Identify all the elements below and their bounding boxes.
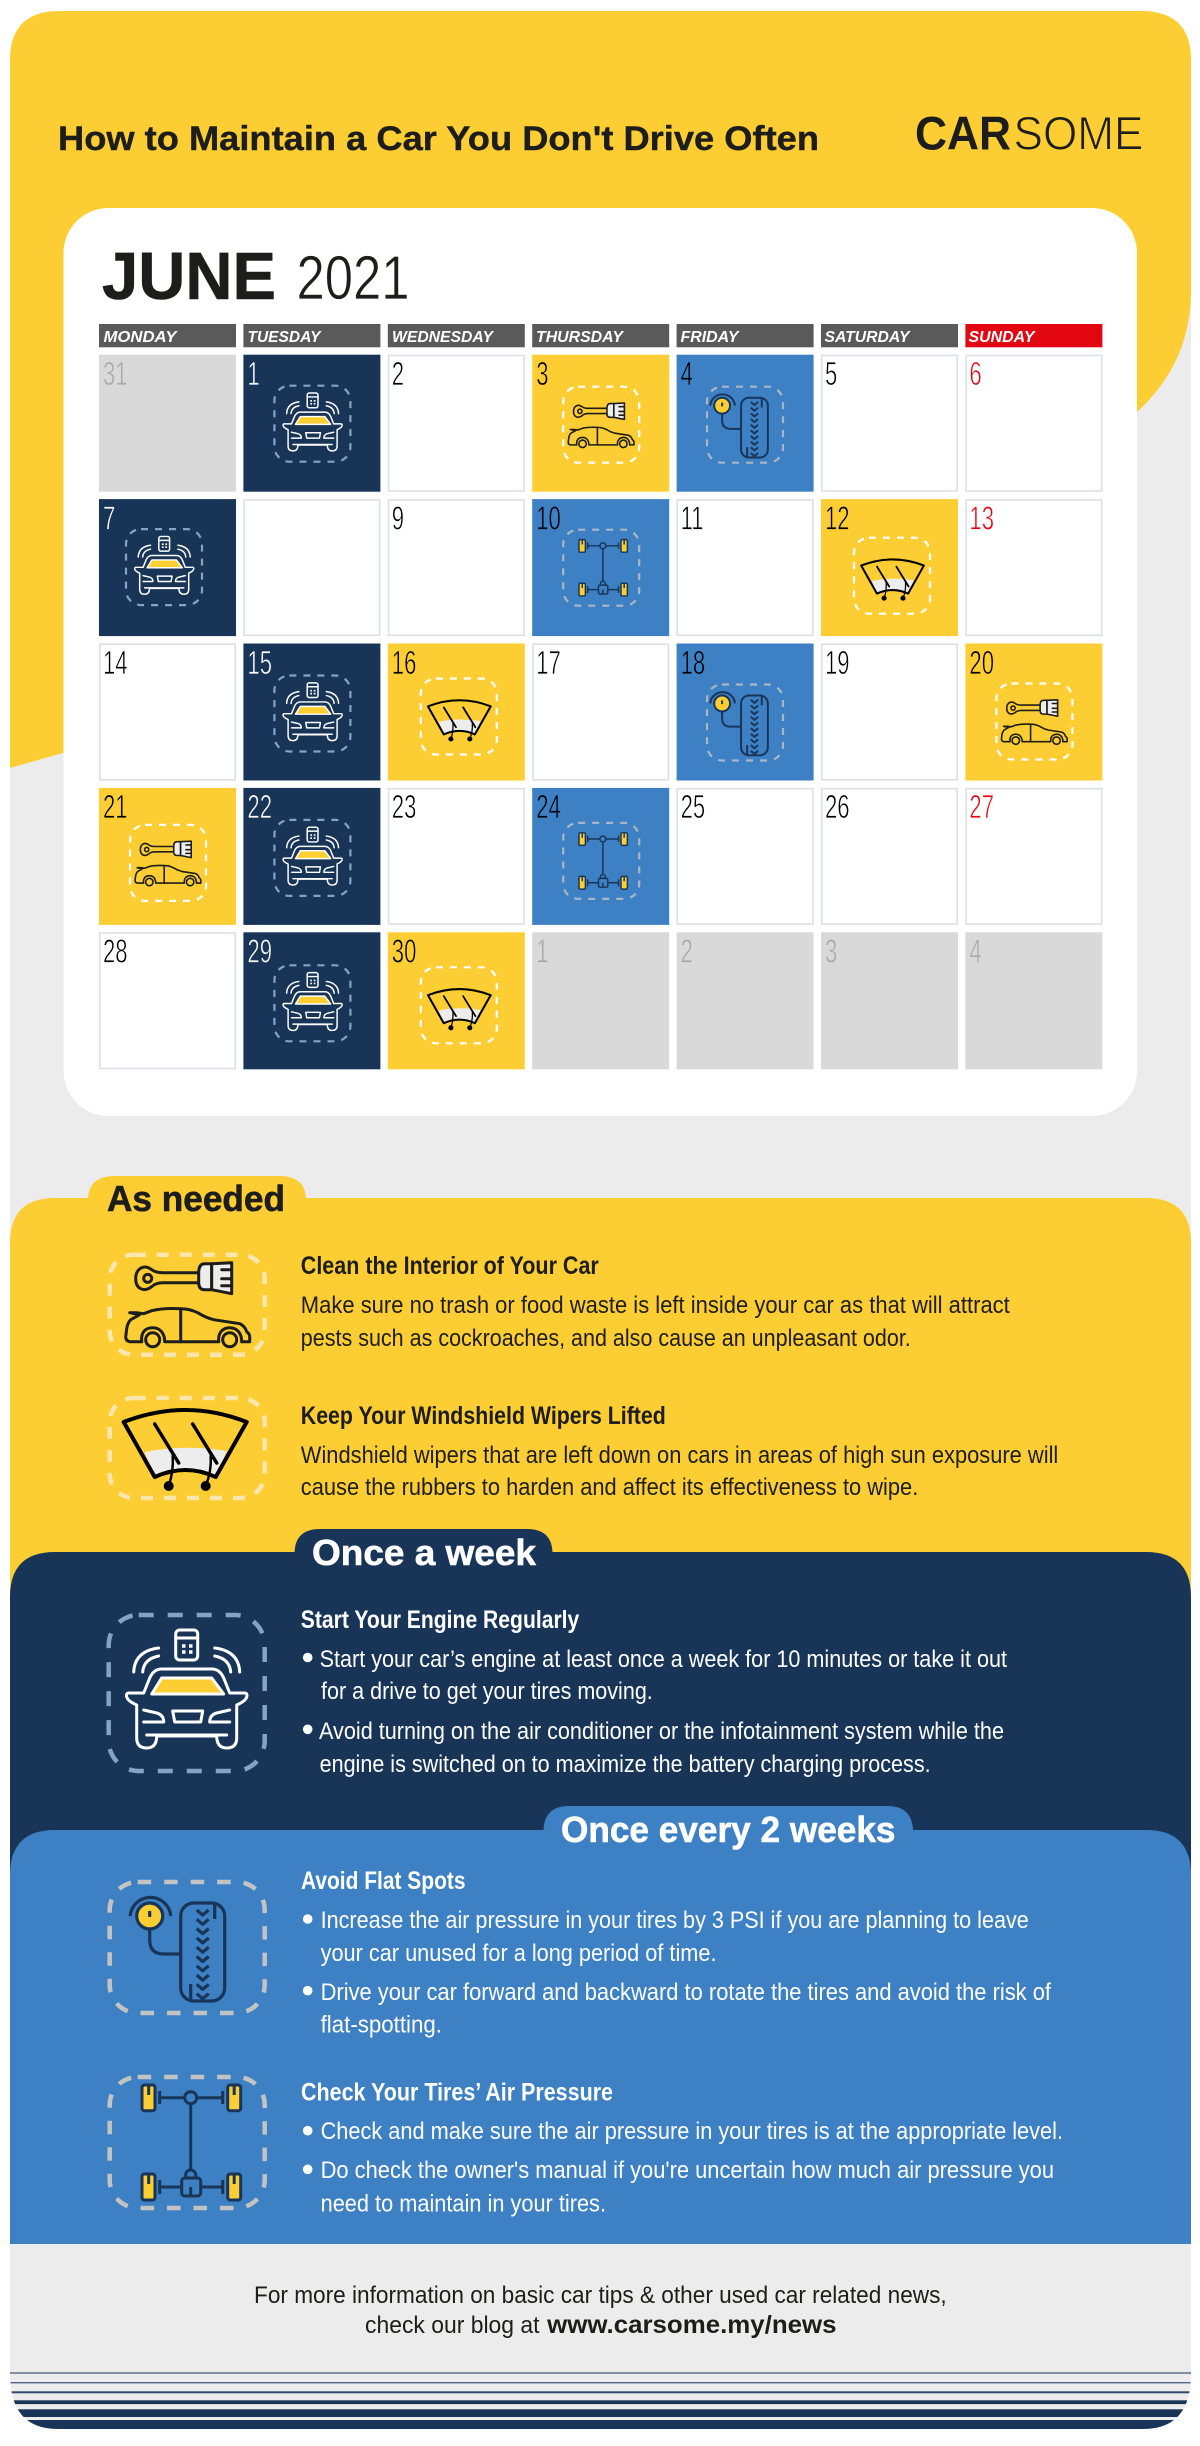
day 10: air pressure: 10 — [536, 500, 561, 536]
day 24: air pressure — [532, 788, 669, 925]
day 28 — [100, 933, 235, 1069]
day 12: wipers: 12 — [825, 500, 850, 536]
footer text: www.carsome.my/news — [546, 2311, 836, 2339]
weekday header row: TUESDAY — [248, 329, 322, 346]
day 24: air pressure: 24 — [536, 789, 561, 825]
text: windshield wipers: Keep Your Windshield Wipers Lifted — [301, 1402, 666, 1430]
day 25: 25 — [681, 789, 705, 825]
icon: windshield wipers — [110, 1398, 265, 1498]
weekday header row: FRIDAY — [680, 329, 740, 346]
text: windshield wipers — [301, 1402, 1058, 1501]
day 13: 13 — [969, 500, 994, 536]
text: avoid flat spots: Drive your car forward and backward to rotate the tires and avoid the risk of — [321, 1979, 1051, 2006]
day 14 — [100, 644, 235, 780]
day 4: flat spots — [677, 355, 814, 492]
panel: calendar card — [64, 208, 1137, 1116]
blank cell — [244, 500, 380, 635]
text: check tire pressure: Check Your Tires’ Air Pressure — [301, 2079, 613, 2107]
text: avoid flat spots: your car unused for a long period of time. — [321, 1940, 716, 1967]
day 3: clean interior: 3 — [536, 356, 548, 392]
day 19: 19 — [825, 644, 850, 681]
day 6: 6 — [969, 356, 982, 392]
day 26: 26 — [825, 789, 850, 825]
panel: yellow header background — [10, 11, 1191, 768]
day 25 — [677, 789, 813, 924]
calendar heading: June 2021: JUNE — [102, 239, 276, 314]
day 20: clean interior: 20 — [969, 644, 994, 681]
panel: once a week — [10, 1529, 1191, 1900]
day 27 — [966, 789, 1102, 924]
day 15: start engine: 15 — [247, 644, 272, 681]
day 17 — [533, 644, 668, 780]
footer text: For more information on basic car tips & other used car related news, — [254, 2282, 947, 2309]
next month day 2 — [677, 932, 814, 1069]
day 23 — [389, 789, 524, 924]
weekday header row: SATURDAY — [824, 329, 911, 346]
tab: as needed: As needed — [107, 1178, 285, 1219]
text: check tire pressure: Check and make sure the air pressure in your tires is at the appropriate level. — [321, 2118, 1063, 2145]
weekday header row: THURSDAY — [536, 329, 624, 346]
day 15: start engine — [243, 644, 380, 780]
weekday header row: WEDNESDAY — [392, 329, 494, 346]
day 11 — [677, 500, 813, 635]
tab: once every 2 weeks: Once every 2 weeks — [561, 1809, 896, 1850]
weekday header row: MONDAY — [104, 329, 178, 346]
text: start your engine: engine is switched on to maximize the battery charging process. — [320, 1751, 931, 1778]
text: avoid flat spots: flat-spotting. — [321, 2012, 442, 2039]
day 5 — [822, 355, 957, 491]
day 7: start engine: 7 — [103, 500, 115, 536]
day 22: start engine — [243, 788, 380, 925]
day 1: start engine: 1 — [247, 356, 260, 392]
previous month day 31 — [99, 355, 236, 492]
next month day 1: 1 — [536, 933, 548, 970]
icon: chassis air pressure — [110, 2077, 265, 2208]
day 29: start engine — [243, 932, 380, 1069]
day 30: wipers: 30 — [392, 933, 416, 970]
text: start your engine — [301, 1606, 1007, 1778]
next month day 1 — [532, 932, 669, 1069]
day 12: wipers — [821, 499, 958, 636]
footer text — [254, 2282, 947, 2339]
previous month day 31: 31 — [103, 356, 128, 392]
footer text: check our blog at — [365, 2312, 540, 2339]
day 3: clean interior — [532, 355, 669, 492]
next month day 4 — [965, 932, 1102, 1069]
icon: clean interior — [110, 1255, 265, 1355]
text: clean the interior — [301, 1252, 1010, 1352]
footer stripes — [0, 2372, 1200, 2429]
day 21: clean interior — [99, 788, 236, 925]
text: avoid flat spots: Avoid Flat Spots — [301, 1867, 466, 1895]
day 9: 9 — [392, 500, 404, 536]
icon: start engine — [109, 1615, 265, 1771]
text: avoid flat spots: Increase the air pressure in your tires by 3 PSI if you are planning to leave — [321, 1907, 1029, 1934]
text: windshield wipers: cause the rubbers to harden and affect its effectiveness to wipe. — [301, 1474, 918, 1501]
text: start your engine: Start Your Engine Regularly — [301, 1606, 579, 1634]
day 18: flat spots — [677, 644, 814, 780]
day 10: air pressure — [532, 499, 669, 636]
day 2: 2 — [392, 356, 404, 392]
day 30: wipers — [388, 932, 525, 1069]
text: avoid flat spots — [301, 1867, 1051, 2039]
day 21: clean interior: 21 — [103, 789, 128, 825]
day 19 — [822, 644, 957, 780]
weekday header row — [99, 324, 1102, 347]
next month day 3 — [821, 932, 958, 1069]
day 28: 28 — [103, 933, 128, 970]
day 26 — [822, 789, 957, 924]
next month day 2: 2 — [681, 933, 693, 970]
next month day 3: 3 — [825, 933, 837, 970]
day 16: wipers: 16 — [392, 644, 416, 681]
weekday header row: SUNDAY — [968, 329, 1036, 346]
day 4: flat spots: 4 — [681, 356, 693, 392]
day 23: 23 — [392, 789, 416, 825]
day 9 — [389, 500, 524, 635]
text: start your engine: for a drive to get your tires moving. — [321, 1678, 653, 1705]
text: start your engine: Avoid turning on the air conditioner or the infotainment system while the — [319, 1718, 1004, 1745]
calendar heading: June 2021 — [102, 239, 410, 314]
day 22: start engine: 22 — [247, 789, 272, 825]
day 2 — [389, 355, 524, 491]
text: check tire pressure — [301, 2079, 1063, 2218]
logo: CARSOME: SOME — [1014, 106, 1144, 159]
day 27: 27 — [969, 789, 994, 825]
day 13 — [966, 500, 1102, 635]
logo: CARSOME — [915, 106, 1144, 159]
day 11: 11 — [681, 500, 704, 536]
text: check tire pressure: Do check the owner's manual if you're uncertain how much air pressure you — [321, 2157, 1054, 2184]
day 7: start engine — [99, 499, 236, 636]
day 14: 14 — [103, 644, 128, 681]
icon: tire flat spots — [110, 1882, 265, 2013]
text: clean the interior: Clean the Interior of Your Car — [301, 1252, 599, 1280]
text: clean the interior: Make sure no trash or food waste is left inside your car as that will attract — [301, 1292, 1010, 1319]
text: clean the interior: pests such as cockroaches, and also cause an unpleasant odor. — [301, 1325, 911, 1352]
tab: once a week: Once a week — [312, 1532, 537, 1573]
day 18: flat spots: 18 — [681, 644, 705, 681]
text: check tire pressure: need to maintain in your tires. — [321, 2191, 606, 2218]
logo: CARSOME: CAR — [915, 106, 1011, 159]
day 6 — [966, 355, 1102, 491]
text: start your engine: Start your car’s engine at least once a week for 10 minutes or take it out — [320, 1646, 1007, 1673]
day 1: start engine — [243, 355, 380, 492]
day 16: wipers — [388, 644, 525, 780]
day 5: 5 — [825, 356, 837, 392]
next month day 4: 4 — [969, 933, 982, 970]
panel: once every 2 weeks — [10, 1806, 1191, 2244]
day 29: start engine: 29 — [247, 933, 272, 970]
panel: as needed — [10, 1176, 1191, 1600]
calendar grid — [99, 355, 1102, 1069]
title: How to Maintain a Car You Don't Drive Often — [58, 120, 819, 158]
day 20: clean interior — [965, 644, 1102, 780]
day 17: 17 — [536, 644, 561, 681]
text: windshield wipers: Windshield wipers that are left down on cars in areas of high sun exposure will — [301, 1442, 1058, 1469]
calendar heading: June 2021: 2021 — [296, 244, 410, 313]
